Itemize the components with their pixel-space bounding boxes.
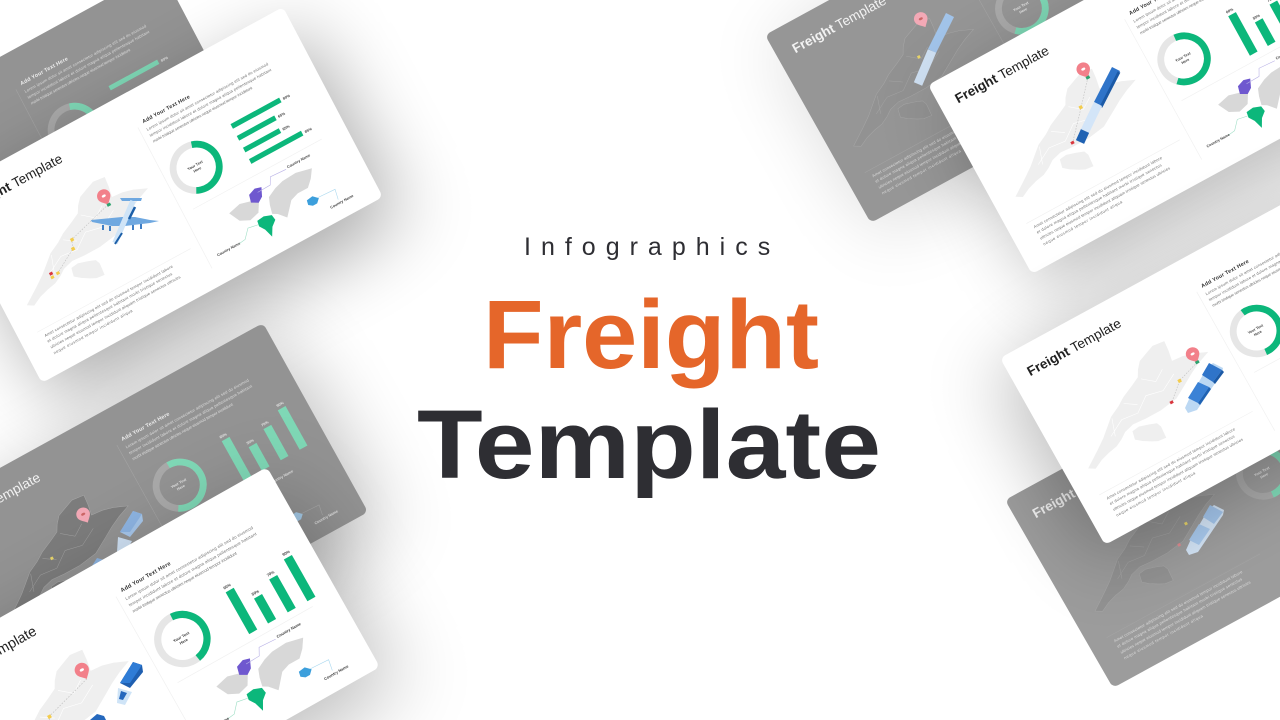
slide title: Freight Template <box>1030 458 1129 521</box>
bottom paragraph: ultricies neque eiusmod tempor incididunt aliquam tristique senectus ultricies <box>1112 437 1244 512</box>
bar chart: 70% <box>266 569 276 578</box>
country map: Country Name <box>330 194 354 210</box>
route markers <box>39 237 85 279</box>
location pin <box>1074 60 1094 81</box>
paragraph: morbi tristique senectus ultricies neque eiusmod tempor incididunt <box>131 550 238 614</box>
shadow <box>947 0 1280 292</box>
bottom paragraph: neque eiusmod tempor incididunt aliqua <box>881 148 962 195</box>
panel: gray slide top left: 80% <box>160 55 169 63</box>
location pin <box>32 660 101 719</box>
paragraph: Lorem ipsum dolor sit amet consectetur adipiscing elit sed do eiusmod <box>146 61 269 132</box>
world map <box>816 1 1001 155</box>
donut chart: Here <box>1260 472 1269 480</box>
donut chart <box>158 128 235 206</box>
donut chart: Here <box>1019 7 1028 15</box>
bottom paragraph: neque eiusmod tempor incididunt aliqua <box>52 308 134 355</box>
country labels <box>269 460 339 535</box>
bottom paragraph: et dolore magna aliqua pellentesque habitant morbi tristique senectus <box>46 271 173 343</box>
bar chart: 85% <box>304 127 313 134</box>
panel: gray slide top left <box>0 0 261 345</box>
icon: train <box>1080 69 1119 142</box>
country map: Country Name <box>276 621 302 639</box>
shadow <box>0 339 386 718</box>
bottom paragraph: ultricies neque eiusmod tempor incididunt aliquam tristique senectus ultricies <box>1039 166 1171 241</box>
world map <box>0 160 174 315</box>
icon: truck <box>90 511 143 569</box>
panel: white slide top left with plane <box>0 7 403 404</box>
slide content <box>0 467 380 720</box>
bar chart: 90% <box>281 549 291 557</box>
bar chart: 70% <box>261 420 270 427</box>
paragraph: tempor incididunt labore et dolore magna aliqua pellentesque habitant <box>128 531 258 607</box>
bottom paragraph: Amet consectetur adipiscing elit sed do eiusmod tempor incididunt labore <box>871 104 1002 178</box>
slide title: Freight Template <box>952 43 1051 106</box>
bar chart: 50% <box>1252 13 1261 21</box>
bar chart: 90% <box>276 401 285 408</box>
panel: white slide right with ship <box>995 172 1280 563</box>
bottom paragraph: ultricies neque eiusmod tempor incididunt aliquam tristique senectus ultricies <box>49 274 181 349</box>
shadow <box>995 190 1280 563</box>
country map: Country Name <box>1206 133 1231 149</box>
shadow <box>775 0 1222 233</box>
bar chart <box>231 90 313 164</box>
donut chart: Your Text <box>1013 1 1030 12</box>
donut chart <box>988 0 1056 42</box>
donut chart: Your Text <box>170 477 188 489</box>
donut chart: Here <box>1181 58 1190 65</box>
bottom paragraph: neque eiusmod tempor incididunt aliqua <box>1115 470 1197 518</box>
donut chart <box>147 604 218 674</box>
bar chart: 65% <box>282 124 291 132</box>
paragraph <box>1132 0 1263 35</box>
country map: Country Name <box>323 663 350 681</box>
panel: gray slide top left: Lorem ipsum dolor sit amet consectetur adipiscing elit sed do eiusmod <box>24 23 147 94</box>
donut chart <box>1227 438 1280 509</box>
donut chart: Here <box>1253 330 1263 337</box>
donut chart <box>147 453 212 517</box>
panel: gray slide top left: tempor incididunt labore et dolore magna aliqua pellentesque habitant <box>27 29 151 100</box>
bottom paragraph: ultricies neque eiusmod tempor incididunt aliquam tristique senectus ultricies <box>877 115 1009 190</box>
panel: white slide top right with train <box>928 0 1280 292</box>
paragraph: tempor incididunt labore et dolore magna aliqua pellentesque habitant <box>128 383 254 455</box>
country map <box>181 611 350 720</box>
bottom paragraph: et dolore magna aliqua pellentesque habitant morbi tristique senectus <box>1109 434 1235 506</box>
bar chart: 60% <box>1225 7 1235 15</box>
panel: gray slide top left: Add Your Text Here <box>20 56 69 87</box>
icon: truck <box>90 662 143 720</box>
route <box>1049 78 1112 143</box>
paragraph: Lorem ipsum dolor sit amet consectetur adipiscing elit sed do eiusmod <box>125 378 250 449</box>
bottom paragraph: et dolore magna aliqua pellentesque habitant morbi tristique senectus <box>1116 577 1243 649</box>
world map <box>0 478 155 634</box>
title: Template: Template <box>417 390 881 499</box>
route <box>16 679 106 720</box>
location pin <box>95 187 115 209</box>
bottom paragraph: et dolore magna aliqua pellentesque habitant morbi tristique senectus <box>1036 162 1162 235</box>
location pin <box>1183 345 1203 365</box>
bar chart: 50% <box>246 438 255 445</box>
bar chart <box>222 549 316 634</box>
bar chart: 60% <box>219 432 228 439</box>
country map <box>196 144 354 268</box>
icon: train <box>918 15 950 84</box>
panel: white slide bottom left with truck <box>0 467 399 720</box>
slide content <box>928 0 1280 274</box>
bottom paragraph: ultricies neque eiusmod tempor incididunt aliquam tristique senectus ultricies <box>1119 580 1251 655</box>
donut chart: Your Text <box>1175 51 1192 63</box>
bar chart: 60% <box>222 582 232 590</box>
route <box>1161 362 1208 402</box>
paragraph: tempor incididunt labore et dolore magna aliqua pellentesque habitant <box>149 67 273 138</box>
paragraph: morbi tristique senectus ultricies neque eiusmod tempor incididunt <box>131 401 234 461</box>
paragraph: Lorem ipsum dolor sit amet consectetur adipiscing elit sed do eiusmod <box>124 525 254 601</box>
bottom paragraph: Amet consectetur adipiscing elit sed do eiusmod tempor incididunt labore <box>43 263 174 338</box>
country map: Country Name <box>286 153 311 169</box>
country map <box>1185 36 1280 160</box>
slide content <box>0 7 383 383</box>
bar chart: 80% <box>282 93 291 101</box>
bottom paragraph: neque eiusmod tempor incididunt aliqua <box>1123 613 1204 660</box>
icon: ship <box>1185 363 1224 413</box>
bottom paragraph: Amet consectetur adipiscing elit sed do eiusmod tempor incididunt labore <box>1033 155 1164 229</box>
donut chart <box>1221 296 1280 366</box>
shadow <box>0 29 403 404</box>
world map <box>0 631 158 720</box>
world map <box>978 52 1163 206</box>
route markers <box>1169 522 1196 547</box>
subtitle: Infographics <box>524 233 780 261</box>
route markers <box>1158 360 1211 404</box>
heading: Add Your Text Here <box>121 411 171 443</box>
panel: gray slide top right <box>765 0 1222 233</box>
location pin <box>912 10 931 30</box>
donut chart: Here <box>179 637 189 646</box>
icon: ship <box>1186 505 1224 555</box>
country labels: Country Name <box>269 469 294 485</box>
bottom paragraph: Amet consectetur adipiscing elit sed do eiusmod tempor incididunt labore <box>1106 426 1236 501</box>
heading: Add Your Text Here <box>120 561 172 594</box>
heading: Add Your Text Here <box>1200 259 1250 290</box>
world map <box>1056 466 1242 620</box>
bottom paragraph: Amet consectetur adipiscing elit sed do eiusmod tempor incididunt labore <box>1113 569 1244 643</box>
donut chart: Here <box>176 484 186 491</box>
bar chart <box>1225 0 1280 56</box>
panel: gray slide top left: morbi tristique senectus ultricies neque eiusmod tempor incididunt <box>30 47 132 106</box>
heading: Add Your Text Here <box>142 94 191 125</box>
bottom paragraph: et dolore magna aliqua pellentesque habitant morbi tristique senectus <box>874 112 1001 184</box>
bottom paragraph: neque eiusmod tempor incididunt aliqua <box>1042 199 1124 246</box>
bar chart: 50% <box>251 588 260 597</box>
paragraph: morbi tristique senectus ultricies neque eiusmod tempor incididunt <box>152 85 254 144</box>
donut chart: Here <box>193 166 202 174</box>
icon: plane <box>91 198 159 244</box>
paragraph <box>1205 225 1280 308</box>
donut chart: Your Text <box>1254 466 1271 477</box>
location pin <box>36 505 101 560</box>
shadow <box>0 484 399 720</box>
route marker <box>917 55 921 59</box>
bar chart <box>219 401 308 481</box>
route <box>41 204 125 273</box>
slide content <box>1000 172 1280 545</box>
donut chart <box>1150 25 1218 93</box>
panel: gray slide bottom right <box>1005 314 1280 688</box>
donut chart: Your Text <box>1247 323 1265 335</box>
title: Freight: Freight <box>483 280 819 389</box>
slide title: Freight Template <box>1024 316 1124 379</box>
panel: gray slide middle left <box>0 323 386 718</box>
route markers <box>1046 75 1114 145</box>
country map: Country Name <box>216 241 241 257</box>
donut chart: Your Text <box>172 630 191 643</box>
donut chart: Your Text <box>187 159 204 171</box>
world map <box>1051 324 1235 478</box>
bar chart: 65% <box>277 111 287 119</box>
country labels: Country Name <box>314 509 339 525</box>
